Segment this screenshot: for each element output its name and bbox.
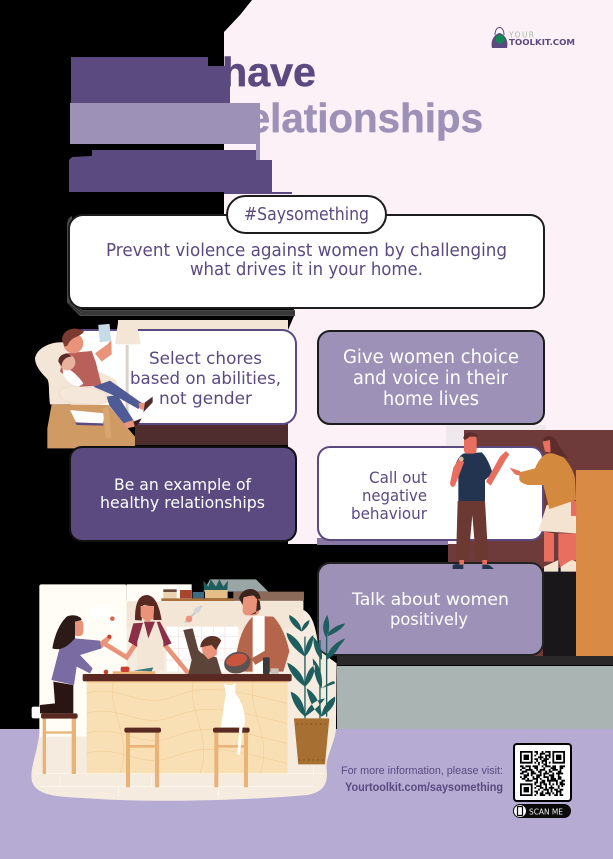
panel: call out: negative [362, 486, 427, 505]
panel: chores: not gender [159, 389, 252, 409]
panel: talk positively: positively [390, 610, 468, 630]
illustration: father with baby [35, 320, 153, 448]
panel: intro: what drives it in your home. [190, 260, 423, 280]
footer text [341, 765, 503, 794]
panel: talk positively: Talk about women [351, 590, 509, 610]
panel: call out: behaviour [351, 504, 427, 523]
logo [492, 28, 575, 48]
scan me badge: SCAN ME [529, 808, 563, 816]
panel: choice and voice: home lives [383, 389, 479, 410]
panel: choice and voice: Give women choice [343, 347, 519, 368]
panel: choice and voice: and voice in their [353, 368, 508, 389]
title [69, 49, 483, 194]
title: relationships [232, 95, 483, 141]
panel: choice and voice [318, 331, 544, 424]
illustration: family in kitchen [31, 579, 345, 801]
panel: chores [70, 330, 296, 424]
panel: chores: based on abilities, [130, 369, 281, 389]
logo: YOUR [508, 30, 534, 40]
panel: healthy example [70, 447, 296, 541]
hashtag pill [227, 196, 386, 233]
hashtag pill: #Saysomething [244, 205, 369, 225]
panel: talk positively [318, 563, 543, 655]
panel: intro [67, 215, 544, 316]
panel: intro: Prevent violence against women by challenging [106, 241, 507, 261]
panel: healthy example: Be an example of [114, 475, 251, 494]
QR code [514, 744, 571, 801]
illustration: man and woman talking [450, 432, 576, 572]
footer text: For more information, please visit: [341, 765, 503, 777]
logo: TOOLKIT.COM [509, 38, 575, 47]
panel: call out: Call out [369, 468, 427, 487]
panel: healthy example: healthy relationships [100, 493, 265, 512]
footer text: Yourtoolkit.com/saysomething [345, 782, 503, 794]
title: have [222, 49, 316, 95]
scan me badge [513, 804, 571, 818]
panel: chores: Select chores [149, 349, 262, 369]
panel: call out [318, 447, 543, 540]
